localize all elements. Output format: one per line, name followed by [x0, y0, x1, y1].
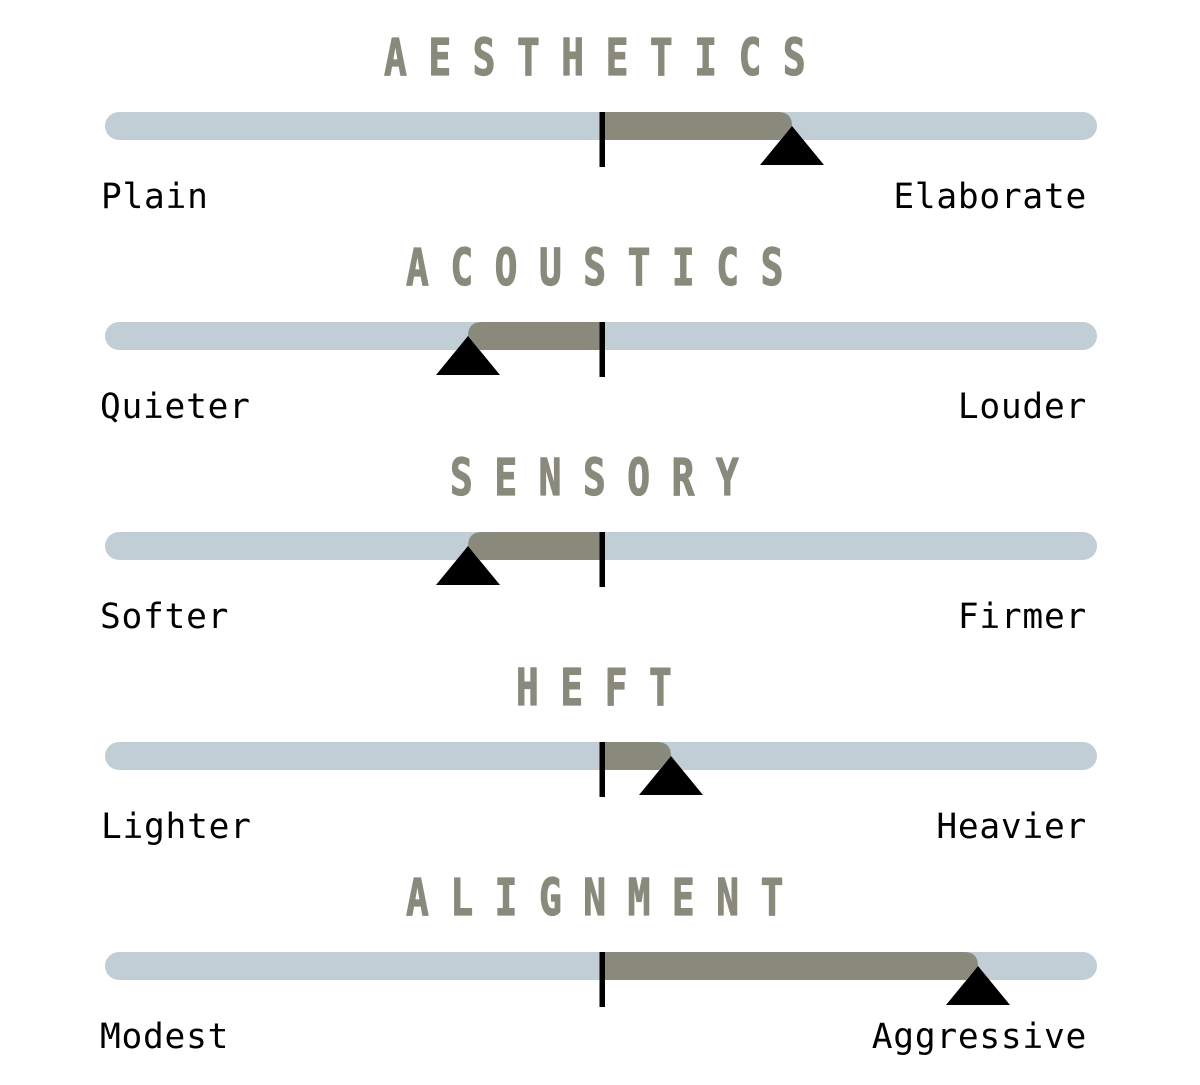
right label: Elaborate: [893, 177, 1087, 217]
left label: Modest: [100, 1017, 229, 1057]
left label: Quieter: [100, 387, 251, 427]
left label: Plain: [101, 177, 209, 217]
triangle marker: [946, 966, 1010, 1005]
slider fill: [603, 742, 671, 770]
panel: heft: [101, 659, 1097, 847]
panel: sensory: [100, 449, 1097, 637]
heading: heft: HEFT: [516, 659, 693, 717]
triangle marker: [760, 126, 824, 165]
panel: acoustics: [100, 239, 1097, 427]
triangle marker: [436, 336, 500, 375]
panel: aesthetics: [101, 29, 1097, 217]
right label: Aggressive: [872, 1017, 1087, 1057]
right label: Heavier: [936, 807, 1087, 847]
slider track: [105, 952, 1097, 980]
center tick: [600, 742, 605, 797]
slider fill: [468, 322, 603, 350]
slider fill: [603, 112, 792, 140]
heading: aesthetics: AESTHETICS: [384, 29, 827, 87]
heading: acoustics: ACOUSTICS: [406, 239, 805, 297]
slider fill: [468, 532, 603, 560]
center tick: [600, 952, 605, 1007]
center tick: [600, 112, 605, 167]
right label: Louder: [958, 387, 1087, 427]
left label: Softer: [100, 597, 229, 637]
triangle marker: [639, 756, 703, 795]
slider track: [105, 532, 1097, 560]
left label: Lighter: [101, 807, 252, 847]
center tick: [600, 532, 605, 587]
heading: sensory: SENSORY: [450, 449, 760, 507]
center tick: [600, 322, 605, 377]
slider track: [105, 322, 1097, 350]
slider fill: [603, 952, 978, 980]
slider track: [105, 742, 1097, 770]
right label: Firmer: [958, 597, 1087, 637]
heading: alignment: ALIGNMENT: [406, 869, 805, 927]
slider track: [105, 112, 1097, 140]
triangle marker: [436, 546, 500, 585]
panel: alignment: [100, 869, 1097, 1057]
